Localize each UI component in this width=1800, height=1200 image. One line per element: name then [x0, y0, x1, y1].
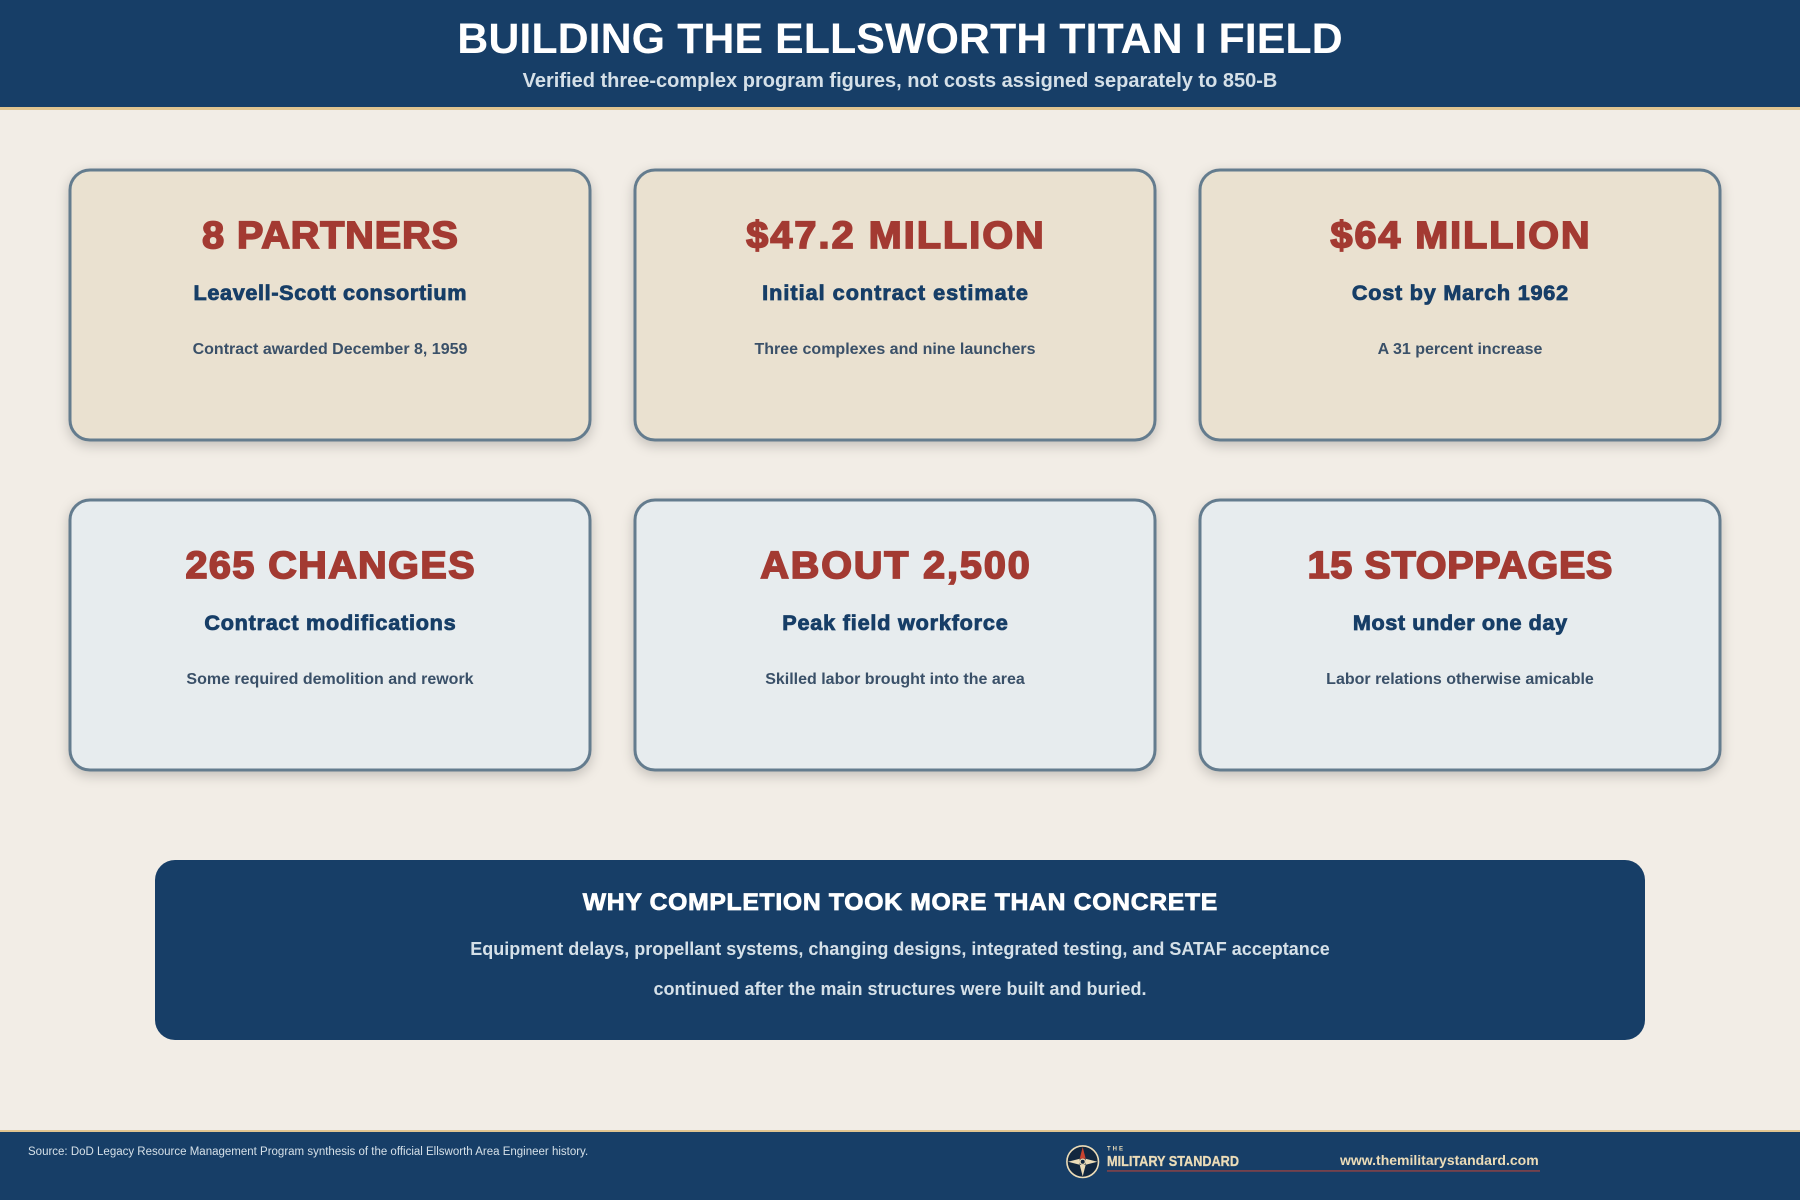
panel: workforce: ABOUT 2,500: [760, 545, 1030, 587]
panel: stoppages: 15 STOPPAGES: [1308, 545, 1612, 587]
panel: initial estimate: $47.2 MILLION: [746, 215, 1044, 257]
header band: [0, 0, 1800, 110]
footer band: [0, 1130, 1800, 1200]
panel: 8 partners: 8 PARTNERS: [202, 215, 458, 257]
panel: contract changes: 265 CHANGES: [185, 545, 475, 587]
panel: 8 partners: Leavell-Scott consortium: [194, 281, 466, 305]
panel: cost by 1962: Cost by March 1962: [1352, 281, 1568, 305]
logo wordmark: MILITARY STANDARD: [1107, 1153, 1239, 1170]
source note: Source: DoD Legacy Resource Management Program synthesis of the official Ellsworth Area Engineer history.: [28, 1146, 588, 1158]
title: BUILDING THE ELLSWORTH TITAN I FIELD: [457, 15, 1343, 63]
logo wordmark: [1107, 1146, 1239, 1170]
panel: cost by 1962: $64 MILLION: [1331, 215, 1589, 257]
panel: workforce: [635, 500, 1155, 770]
panel: initial estimate: [635, 170, 1155, 440]
panel: contract changes: [70, 500, 590, 770]
panel: workforce: Skilled labor brought into the area: [765, 671, 1025, 688]
panel: cost by 1962: A 31 percent increase: [1378, 341, 1543, 358]
callout: why completion took more than concrete: WHY COMPLETION TOOK MORE THAN CONCRETE: [583, 889, 1217, 916]
callout: why completion took more than concrete: [155, 860, 1645, 1040]
panel: stoppages: [1200, 500, 1720, 770]
icon: compass logo: [1067, 1146, 1098, 1177]
panel: workforce: Peak field workforce: [782, 611, 1008, 635]
panel: initial estimate: Initial contract estimate: [762, 281, 1028, 305]
subtitle: Verified three-complex program figures, not costs assigned separately to 850-B: [523, 70, 1277, 92]
callout: why completion took more than concrete: continued after the main structures were built and buried.: [653, 979, 1147, 999]
panel: contract changes: Some required demolition and rework: [186, 671, 474, 688]
panel: stoppages: Labor relations otherwise amicable: [1326, 671, 1594, 688]
callout: why completion took more than concrete: Equipment delays, propellant systems, changing designs, integrated testing, and SATAF acceptance: [470, 939, 1330, 959]
panel: contract changes: Contract modifications: [204, 611, 456, 635]
panel: 8 partners: Contract awarded December 8, 1959: [193, 341, 467, 358]
logo wordmark: THE: [1107, 1146, 1125, 1152]
website url: www.themilitarystandard.com: [1339, 1152, 1539, 1168]
panel: stoppages: Most under one day: [1353, 611, 1567, 635]
panel: 8 partners: [70, 170, 590, 440]
panel: initial estimate: Three complexes and nine launchers: [755, 341, 1036, 358]
panel: cost by 1962: [1200, 170, 1720, 440]
